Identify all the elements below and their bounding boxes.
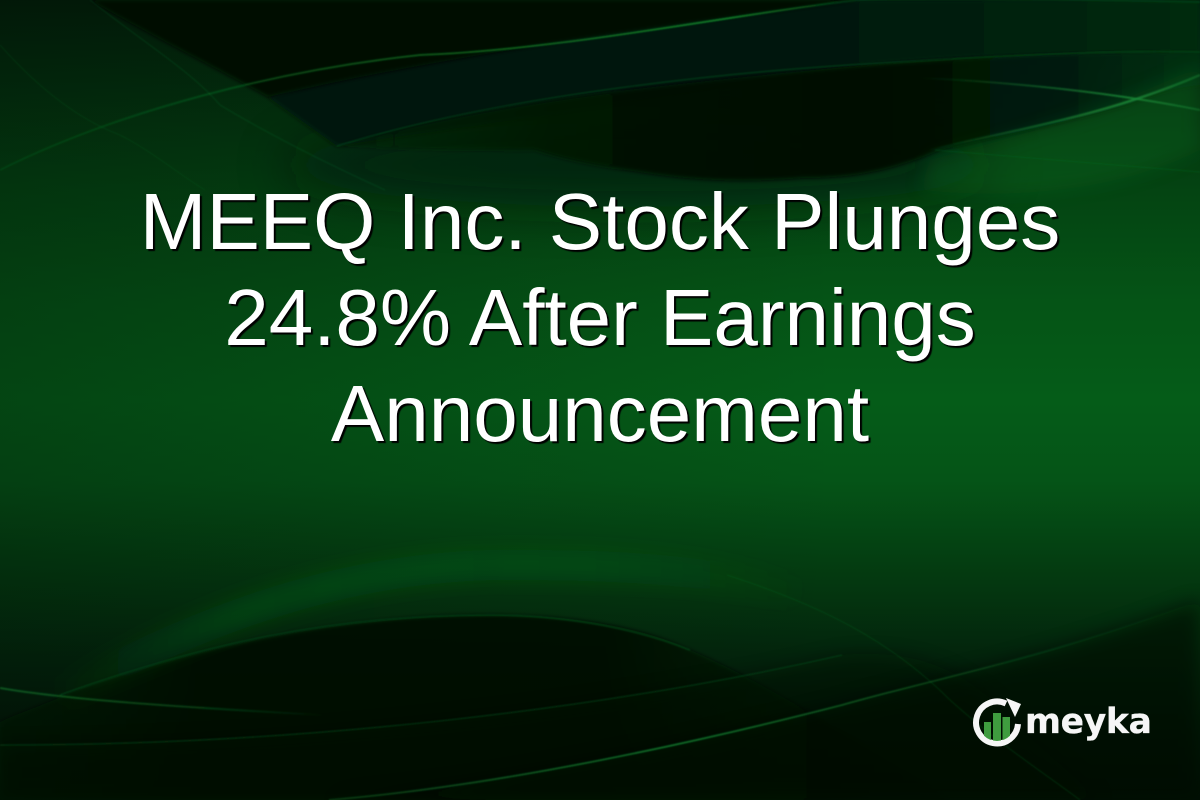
title bbox=[140, 177, 1060, 458]
logo: meyka bbox=[972, 698, 1152, 746]
logo text: meyka bbox=[1025, 702, 1152, 742]
title: 24.8% After Earnings bbox=[224, 273, 976, 362]
icon: circular arrow with bars bbox=[972, 698, 1021, 746]
top regions bbox=[280, 123, 1000, 207]
title: MEEQ Inc. Stock Plunges bbox=[140, 177, 1060, 266]
bottom regions bbox=[0, 615, 950, 800]
title: Announcement bbox=[331, 369, 869, 458]
